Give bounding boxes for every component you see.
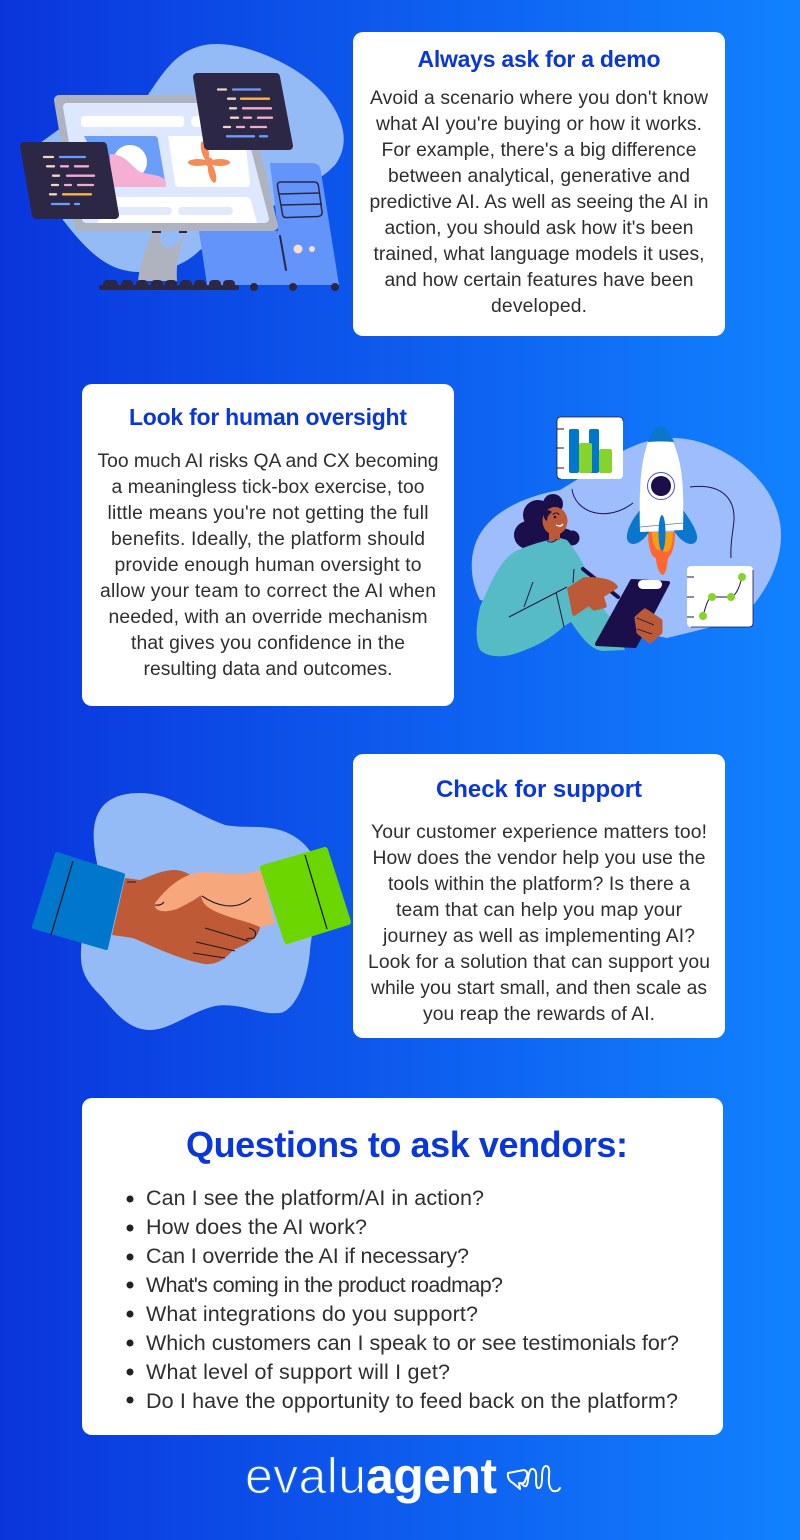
bullet list of questions: Which customers can I speak to or see testimonials for? [146, 1331, 679, 1355]
panel: check for support [353, 754, 725, 1038]
text block: support advice [368, 822, 710, 1025]
panel: look for human oversight [82, 384, 454, 706]
text block: oversight advice: Too much AI risks QA and CX becoming [98, 451, 438, 472]
illustration: woman with rocket and charts [472, 417, 781, 656]
icon: speech bubble with sound waves [508, 1466, 560, 1491]
text block: demo advice: Avoid a scenario where you don't know [370, 88, 708, 109]
text block: demo advice: action, you should ask how it's been [384, 218, 694, 239]
heading: questions to ask vendors: Questions to ask vendors: [186, 1124, 628, 1165]
text block: oversight advice: that gives you confidence in the [131, 633, 405, 654]
text block: support advice: team that can help you map your [396, 900, 683, 921]
bullet list of questions: Can I override the AI if necessary? [146, 1244, 469, 1268]
text block: demo advice [370, 88, 708, 317]
text block: demo advice: what AI you're buying or how it works. [375, 114, 702, 135]
text block: oversight advice: benefits. Ideally, the platform should [111, 529, 425, 550]
bullet list of questions: What's coming in the product roadmap? [146, 1273, 503, 1297]
text block: oversight advice [98, 451, 438, 680]
text block: oversight advice: little means you're not getting the full [108, 503, 428, 524]
bullet list of questions: Do I have the opportunity to feed back on the platform? [146, 1389, 678, 1413]
bullet list of questions: How does the AI work? [146, 1215, 367, 1239]
heading: check for support: Check for support [436, 776, 642, 803]
bullet list of questions [126, 1186, 679, 1413]
text block: support advice: journey as well as implementing AI? [382, 926, 695, 947]
text block: demo advice: and how certain features have been [384, 270, 694, 291]
text block: demo advice: predictive AI. As well as seeing the AI in [370, 192, 708, 213]
text block: oversight advice: needed, with an override mechanism [108, 607, 428, 628]
text block: oversight advice: provide enough human oversight to [114, 555, 422, 576]
bullet list of questions: What integrations do you support? [146, 1302, 478, 1326]
logo: evaluagent: evalu [245, 1448, 366, 1504]
heading: look for human oversight: Look for human oversight [129, 404, 407, 430]
logo: evaluagent: agent [366, 1448, 497, 1504]
text block: support advice: while you start small, and then scale as [370, 978, 707, 999]
text block: demo advice: between analytical, generative and [388, 166, 690, 187]
text block: support advice: How does the vendor help you use the [372, 848, 706, 869]
panel: questions to ask vendors [82, 1098, 723, 1435]
text block: support advice: Your customer experience matters too! [371, 822, 707, 843]
bullet list of questions: Can I see the platform/AI in action? [146, 1186, 484, 1210]
text block: support advice: tools within the platform? Is there a [388, 874, 690, 895]
text block: oversight advice: a meaningless tick-box exercise, too [112, 477, 424, 498]
illustration: handshake [34, 793, 348, 1030]
logo: evaluagent [245, 1448, 560, 1504]
text block: oversight advice: allow your team to correct the AI when [100, 581, 436, 602]
panel: always ask for a demo [353, 32, 725, 336]
bullet list of questions: What level of support will I get? [146, 1360, 450, 1384]
text block: demo advice: For example, there's a big difference [382, 140, 696, 161]
text block: support advice: Look for a solution that can support you [368, 952, 710, 973]
text block: demo advice: trained, what language models it uses, [374, 244, 704, 265]
text block: oversight advice: resulting data and outcomes. [144, 659, 392, 680]
illustration: computer with code windows [24, 44, 344, 291]
text block: support advice: you reap the rewards of AI. [423, 1004, 655, 1025]
text block: demo advice: developed. [491, 296, 587, 317]
heading: always ask for a demo: Always ask for a demo [418, 46, 660, 72]
